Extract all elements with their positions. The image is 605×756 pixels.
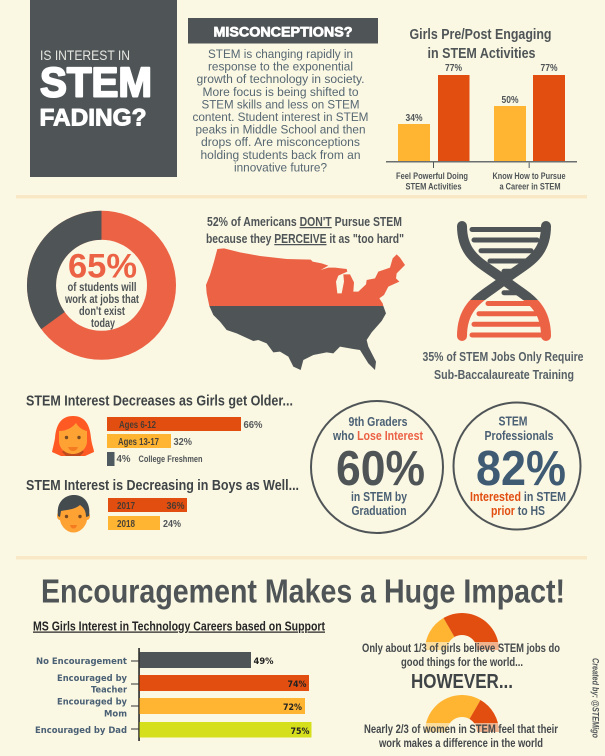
text block: misconceptions body: More focus is being shifted to	[202, 85, 359, 99]
callout: 82 percent circle: Interested in STEM	[470, 490, 566, 504]
category labels: Encouraged by Dad	[35, 726, 127, 736]
bar values: 77%	[540, 63, 558, 74]
heading: 52 percent of Americans	[206, 215, 404, 246]
category labels: Teacher	[91, 686, 128, 696]
text block: misconceptions body: response to the exponential	[208, 60, 353, 74]
axis labels: STEM Activities	[406, 182, 462, 192]
callout: 60 percent circle: Graduation	[352, 504, 406, 518]
chart title	[410, 27, 552, 62]
donut chart: 65 percent	[27, 211, 162, 345]
category labels: Mom	[104, 710, 127, 720]
text block: two thirds of women	[364, 724, 558, 750]
map: United States split	[206, 248, 405, 370]
bar values	[406, 63, 558, 124]
callout: 82 percent circle	[454, 402, 580, 530]
bar: 2018: 2018	[117, 519, 135, 530]
big number: 82%	[476, 442, 566, 496]
text block: misconceptions body	[192, 47, 368, 174]
bar: 2017: 36%	[166, 501, 185, 512]
heading: 52 percent of Americans: 52% of Americans DON'T Pursue STEM	[207, 215, 402, 229]
text block: misconceptions body: holding students back from an	[200, 148, 361, 162]
bar: 2017	[108, 498, 187, 512]
callout: 60 percent circle: 9th Graders	[348, 415, 408, 429]
chart title: MS Girls Interest in Technology Careers based on Support	[33, 620, 326, 634]
credit: Created by: @STEMigo	[590, 658, 600, 738]
text block: two thirds of women: Nearly 2/3 of women in STEM feel that their	[364, 724, 558, 736]
heading bar: misconceptions	[188, 18, 378, 44]
text block: misconceptions body: STEM is changing rapidly in	[208, 47, 353, 61]
chart: one third gauge	[420, 613, 505, 652]
callout: 82 percent circle: Professionals	[484, 429, 554, 443]
big number: 65%	[68, 248, 137, 286]
bar values: 74%	[288, 680, 306, 690]
callout: 82 percent circle: prior to HS	[491, 504, 545, 518]
text block: misconceptions body: STEM skills and less on STEM	[202, 97, 360, 111]
bar chart: girls pre/post engaging	[386, 27, 577, 192]
text block: misconceptions body: drops off. Are misconceptions	[201, 135, 360, 149]
callout: 60 percent circle: who Lose Interest	[332, 429, 424, 443]
axis labels: Feel Powerful Doing	[396, 171, 468, 181]
donut caption: don't exist	[79, 306, 125, 318]
heading bar: misconceptions: MISCONCEPTIONS?	[214, 24, 352, 40]
chart title: Girls Pre/Post Engaging	[410, 27, 552, 43]
axis labels	[396, 171, 566, 192]
callout: 82 percent circle: STEM	[498, 414, 528, 428]
bar: ages 6-12: 66%	[244, 420, 263, 431]
bar chart: support for technology careers	[33, 620, 326, 741]
bar values: 34%	[406, 113, 423, 124]
bar values	[254, 657, 310, 737]
chart title: in STEM Activities	[428, 46, 536, 62]
heading: girls interest: STEM Interest Decreases as Girls get Older...	[26, 392, 293, 410]
heading: however: HOWEVER...	[411, 671, 513, 693]
panel: misconceptions	[188, 18, 378, 174]
icon: girl face	[52, 416, 94, 456]
icon: DNA helix	[462, 226, 546, 336]
text block: one third of girls: Only about 1/3 of girls believe STEM jobs do	[362, 643, 560, 655]
callout: 60 percent circle	[311, 401, 443, 533]
axis labels: a Career in STEM	[500, 182, 560, 192]
axis labels: Know How to Pursue	[492, 171, 566, 181]
category labels: No Encouragement	[36, 657, 128, 667]
text block: misconceptions body: innovative future?	[234, 160, 327, 174]
heading: STEM: STEM	[40, 58, 152, 106]
bar: ages 13-17: 32%	[174, 437, 192, 448]
chart: two thirds gauge	[420, 695, 505, 733]
text block: two thirds of women: work makes a difference in the world	[378, 738, 543, 750]
bar: college freshmen: 4%	[116, 454, 131, 465]
bar values: 72%	[283, 703, 302, 713]
heading: 52 percent of Americans: because they PERCEIVE it as "too hard"	[206, 232, 404, 246]
donut caption: work at jobs that	[64, 294, 139, 306]
text block: one third of girls: good things for the world...	[401, 657, 523, 669]
category labels	[35, 657, 128, 736]
bar: college freshmen	[107, 452, 203, 466]
bar: college freshmen: College Freshmen	[138, 454, 203, 465]
text block: sub-baccalaureate jobs	[422, 350, 584, 382]
heading: is interest in: IS INTEREST IN	[40, 48, 130, 63]
category labels: Encouraged by	[57, 674, 127, 684]
text block: sub-baccalaureate jobs: Sub-Baccalaureate Training	[434, 368, 574, 382]
bar: 2018	[108, 516, 181, 530]
donut caption: of students will	[68, 282, 136, 294]
heading: fading: FADING?	[40, 104, 146, 132]
bar values: 50%	[502, 95, 519, 106]
panel: boys interest	[26, 477, 299, 532]
icon: boy face	[57, 495, 90, 532]
category labels: Encouraged by	[57, 698, 127, 708]
bar values: 77%	[445, 63, 462, 74]
text block: misconceptions body: content. Student interest in STEM	[192, 110, 368, 124]
bar: 2018: 24%	[163, 519, 181, 530]
bar: ages 6-12	[107, 417, 263, 431]
bar: ages 13-17	[107, 434, 192, 448]
bar: ages 13-17: Ages 13-17	[118, 437, 159, 448]
bar: 2017: 2017	[117, 501, 135, 512]
text block: misconceptions body: growth of technology in society.	[196, 72, 364, 86]
donut caption	[64, 282, 139, 330]
bar values: 75%	[290, 727, 310, 737]
big number: 60%	[336, 442, 425, 496]
panel: title block	[30, 0, 177, 177]
panel: girls interest	[26, 392, 293, 466]
donut caption: today	[91, 318, 115, 330]
bar values: 49%	[254, 657, 274, 667]
bar: ages 6-12: Ages 6-12	[119, 420, 156, 431]
text block: misconceptions body: peaks in Middle School and then	[196, 123, 366, 137]
text block: one third of girls	[362, 643, 560, 669]
callout: 60 percent circle: in STEM by	[351, 490, 407, 504]
heading: boys interest: STEM Interest is Decreasing in Boys as Well...	[26, 477, 299, 494]
